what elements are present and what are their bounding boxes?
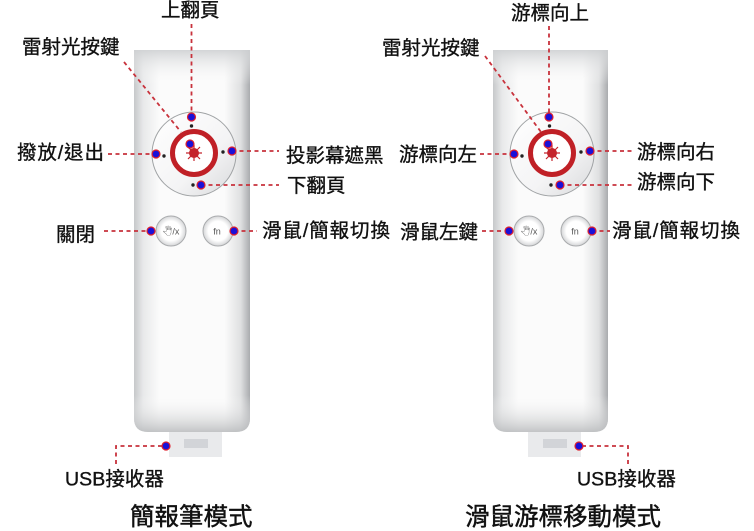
fn button [203,216,233,246]
label: cursor left: 游標向左 [399,144,477,166]
mouse left button: 🖑/x [521,226,538,236]
direction pad [510,112,594,196]
label: cursor up: 游標向上 [511,2,589,24]
fn button: fn [571,226,579,236]
label: cursor right: 游標向右 [637,142,715,164]
label: laser button: 雷射光按鍵 [22,36,120,58]
USB receiver [169,432,222,457]
label: mouse and presentation switch: 滑鼠/簡報切換 [612,220,740,242]
title: presentation mode: 簡報筆模式 [130,503,252,531]
remote body [493,50,608,432]
label: cursor down: 游標向下 [637,172,715,194]
label: page up: 上翻頁 [161,0,220,22]
title: mouse cursor move mode: 滑鼠游標移動模式 [465,503,661,531]
marker dots [147,113,238,450]
callout lines [104,24,279,464]
USB receiver [528,432,581,457]
fn button: fn [213,226,221,236]
power button [156,216,186,246]
fn button [561,216,591,246]
label: mouse and presentation switch: 滑鼠/簡報切換 [262,220,390,242]
label: USB receiver: USB接收器 [577,468,676,490]
remote body [134,50,250,432]
mouse left button [514,216,544,246]
marker dots [505,113,596,450]
label: mouse left button: 滑鼠左鍵 [400,222,478,244]
direction pad [152,112,236,196]
label: USB receiver: USB接收器 [65,468,164,490]
panel: mouse cursor mode remote [382,2,740,531]
label: laser button: 雷射光按鍵 [382,38,480,60]
callout lines [480,26,634,464]
panel: presentation mode remote [17,0,390,531]
label: screen blackout: 投影幕遮黑 [286,145,384,167]
label: off: 關閉 [56,224,95,246]
power button: 🖑/x [163,226,180,236]
label: play and exit: 撥放/退出 [17,142,104,164]
label: page down: 下翻頁 [287,175,346,197]
